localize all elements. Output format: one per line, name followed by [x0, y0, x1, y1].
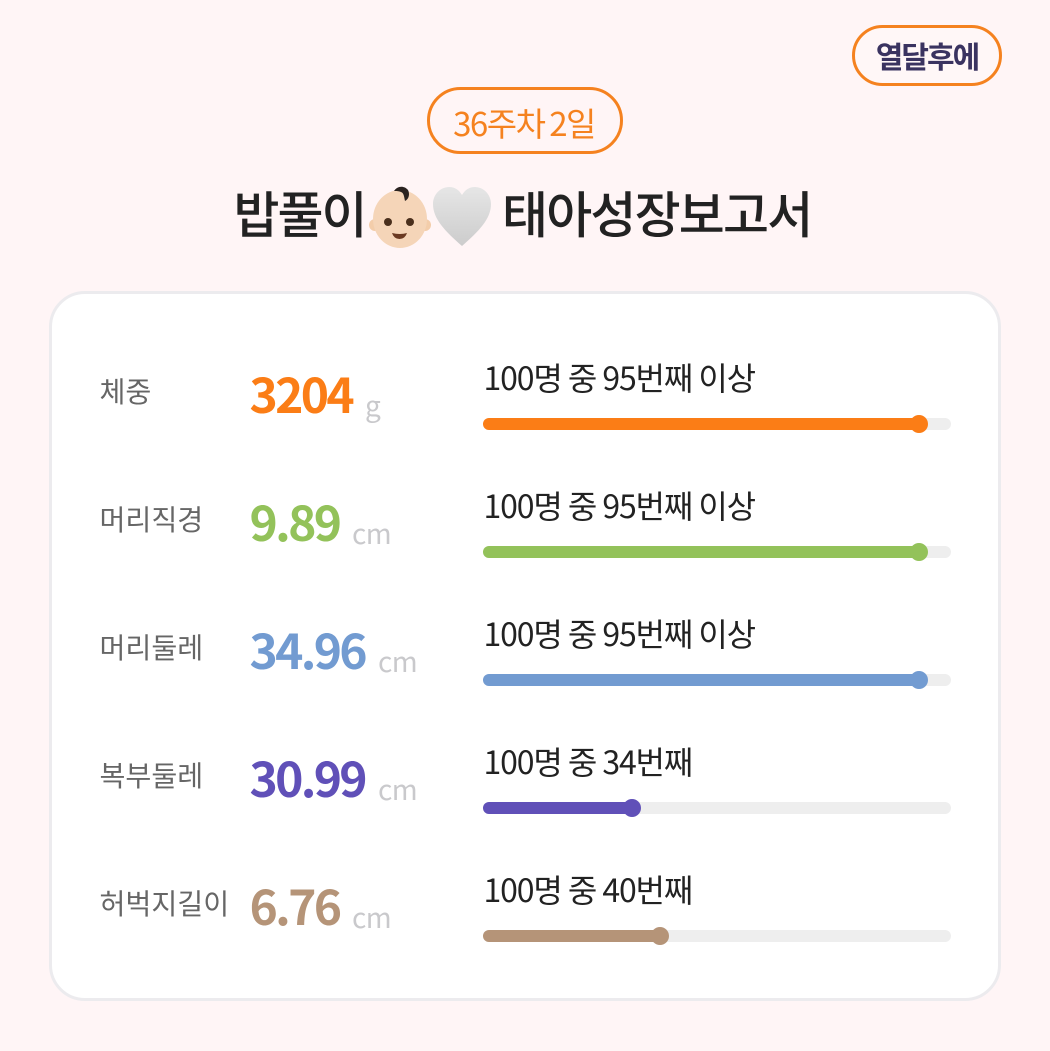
- row: femur length: 100명 중 40번째: [484, 866, 692, 912]
- row: weight: [100, 354, 951, 433]
- badge: week: 36주차 2일: [453, 98, 595, 146]
- row: abdominal circumference: 복부둘레: [100, 754, 203, 795]
- badge: brand: [852, 25, 1002, 86]
- badge: brand: 열달후에: [876, 33, 978, 77]
- row: weight: 3204: [250, 357, 352, 427]
- title: 태아성장보고서: [502, 176, 811, 248]
- row: weight: 체중: [100, 370, 151, 411]
- row: abdominal circumference: [100, 738, 951, 817]
- panel: growth report: [49, 291, 1001, 1001]
- row: head diameter: 100명 중 95번째 이상: [484, 482, 755, 528]
- title: 밥풀이: [234, 176, 366, 248]
- row: head circumference: cm: [378, 641, 417, 681]
- row: abdominal circumference: 100명 중 34번째: [484, 738, 692, 784]
- row: head circumference: [100, 610, 951, 689]
- icon: white heart: [433, 187, 491, 246]
- row: abdominal circumference: 30.99: [250, 741, 365, 811]
- icon: baby emoji: [369, 186, 431, 248]
- row: head circumference: 34.96: [250, 613, 365, 683]
- row: femur length: [100, 866, 951, 945]
- row: weight: g: [365, 385, 380, 425]
- badge: week: [427, 87, 623, 154]
- row: femur length: 허벅지길이: [100, 882, 229, 923]
- row: femur length: cm: [352, 897, 391, 937]
- row: head diameter: cm: [352, 513, 391, 553]
- row: femur length: 6.76: [250, 869, 339, 939]
- title: [234, 176, 811, 248]
- row: head diameter: [100, 482, 951, 561]
- row: weight: 100명 중 95번째 이상: [484, 354, 755, 400]
- row: head diameter: 머리직경: [100, 498, 203, 539]
- row: head circumference: 100명 중 95번째 이상: [484, 610, 755, 656]
- row: abdominal circumference: cm: [378, 769, 417, 809]
- row: head circumference: 머리둘레: [100, 626, 203, 667]
- row: head diameter: 9.89: [250, 485, 339, 555]
